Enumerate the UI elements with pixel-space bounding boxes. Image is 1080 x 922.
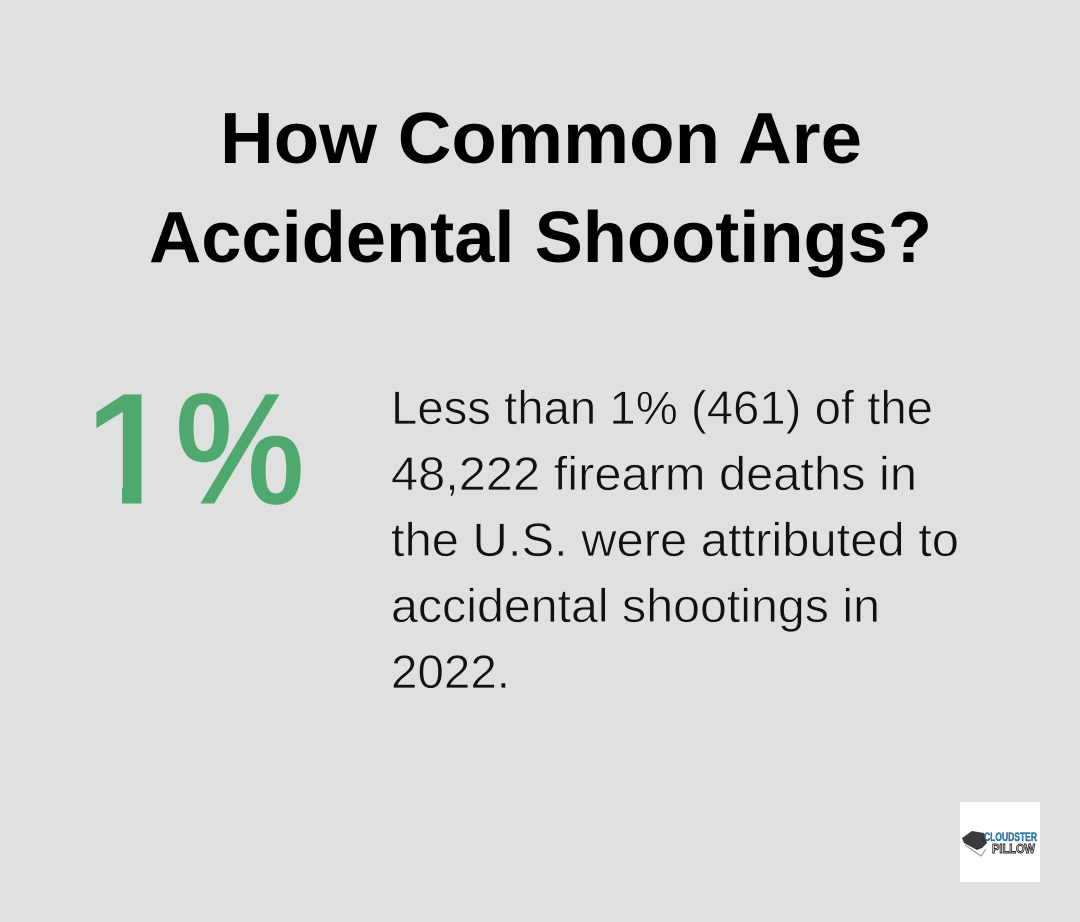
- description text: accidental shootings in: [391, 579, 880, 632]
- logo wordmark: PILLOW: [992, 841, 1036, 856]
- description text: the U.S. were attributed to: [391, 513, 959, 566]
- title: Accidental Shootings?: [149, 198, 932, 278]
- big statistic: 1%: 1: [85, 359, 174, 538]
- logo wordmark: [984, 830, 1037, 856]
- description text: 48,222 firearm deaths in: [391, 447, 917, 500]
- title: [149, 99, 932, 278]
- logo: Cloudster Pillow: [960, 802, 1040, 882]
- big statistic: 1%: %: [175, 359, 305, 538]
- logo wordmark: CLOUDSTER: [984, 830, 1037, 844]
- big statistic: 1%: [96, 393, 301, 505]
- description text: 2022.: [391, 645, 510, 698]
- title: How Common Are: [220, 99, 862, 179]
- description text: [391, 381, 959, 698]
- infographic canvas: [96, 112, 1040, 882]
- description text: Less than 1% (461) of the: [391, 381, 933, 434]
- icon: pillow: [962, 831, 987, 856]
